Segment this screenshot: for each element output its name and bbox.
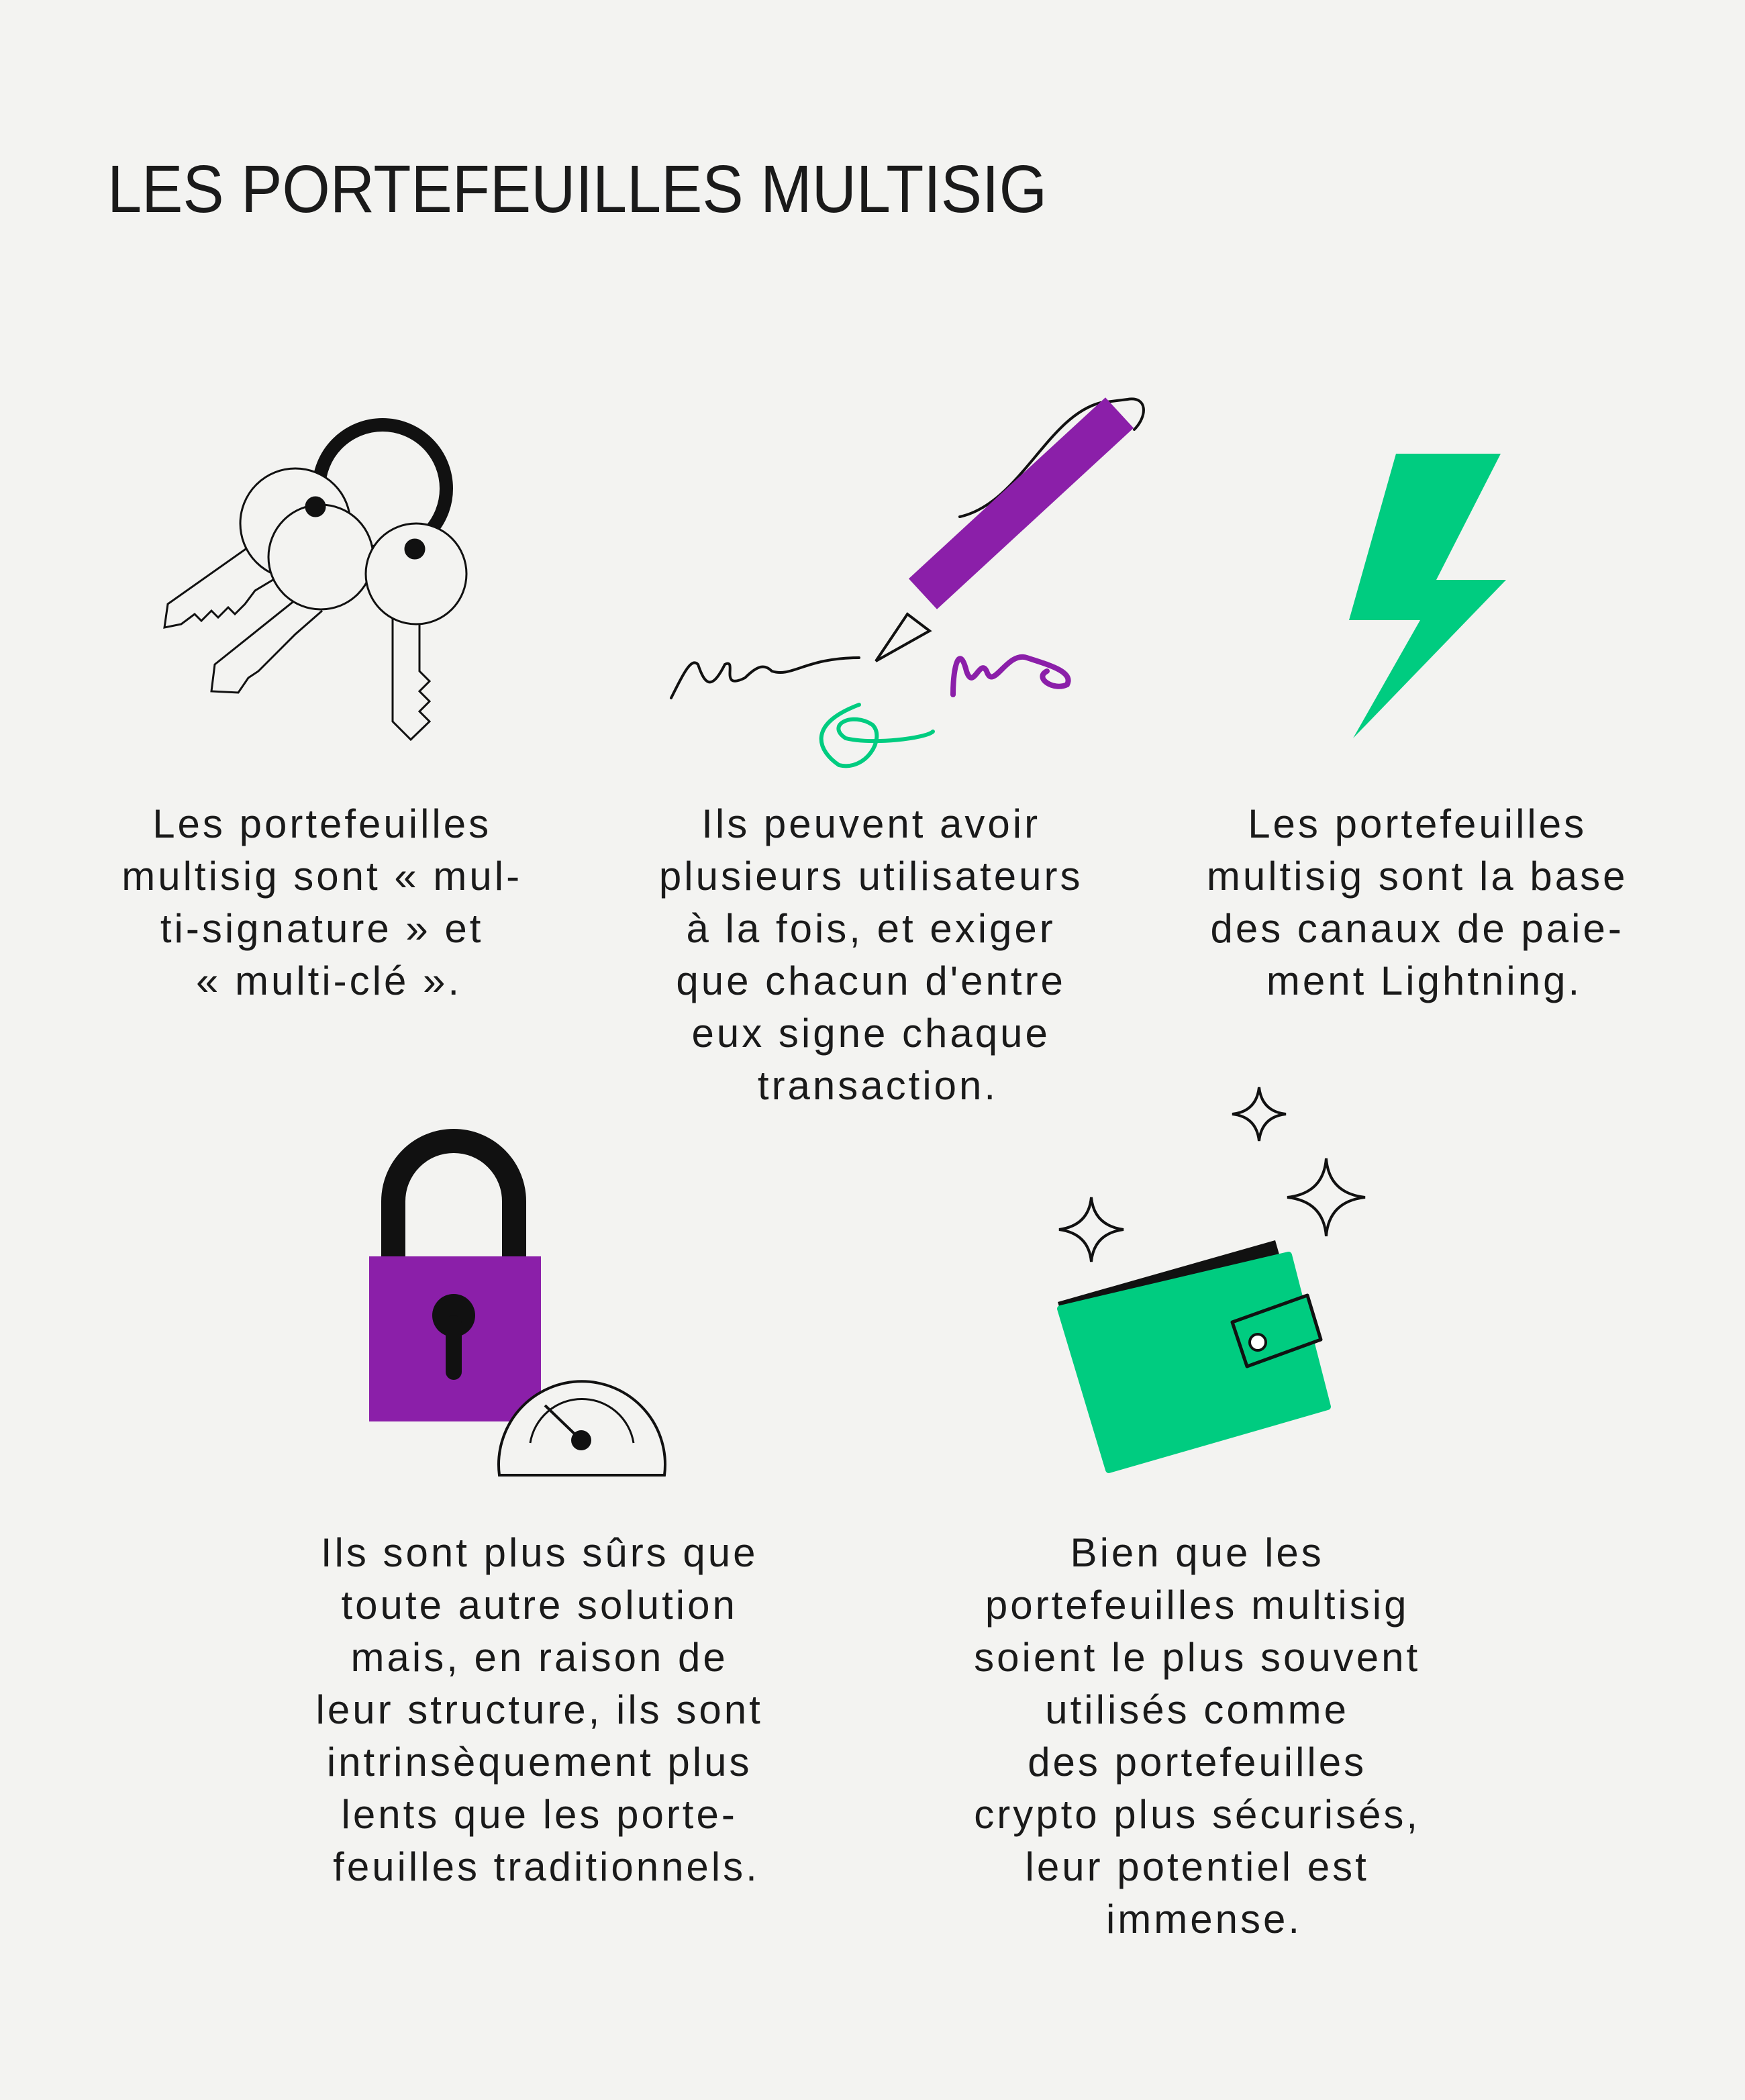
text: col3: Les portefeuilles <box>1248 801 1587 846</box>
text: lock: lents que les porte- <box>342 1792 738 1837</box>
text: wallet: utilisés comme <box>1045 1687 1349 1732</box>
text: wallet: crypto plus sécurisés, <box>974 1792 1420 1837</box>
text: col1: Les portefeuilles <box>152 801 491 846</box>
text: wallet: soient le plus souvent <box>974 1635 1420 1680</box>
text: col2: que chacun d'entre <box>676 958 1066 1003</box>
text: col2: eux signe chaque <box>691 1011 1050 1056</box>
text: wallet: des portefeuilles <box>1028 1740 1366 1785</box>
icon: wallet with sparkles <box>1058 1087 1365 1470</box>
text: col1: ti-signature » et <box>160 906 483 951</box>
text: lock: mais, en raison de <box>351 1635 728 1680</box>
text: lock: Ils sont plus sûrs que <box>321 1530 758 1575</box>
text: col2: plusieurs utilisateurs <box>659 854 1083 899</box>
text: col1: « multi-clé ». <box>196 958 462 1003</box>
text: col3: des canaux de paie- <box>1210 906 1624 951</box>
text: col2: transaction. <box>758 1063 998 1108</box>
icon: padlock with gauge <box>369 1141 665 1475</box>
text: lock: toute autre solution <box>341 1583 738 1628</box>
text: wallet: immense. <box>1106 1897 1302 1942</box>
icon: lightning <box>1349 454 1506 738</box>
text: lock: feuilles traditionnels. <box>333 1844 760 1889</box>
icon: keys <box>164 425 466 740</box>
text: col3: multisig sont la base <box>1207 854 1628 899</box>
text: col3: ment Lightning. <box>1266 958 1582 1003</box>
text: wallet: leur potentiel est <box>1026 1844 1369 1889</box>
text: col1: multisig sont « mul- <box>121 854 522 899</box>
text: col2: Ils peuvent avoir <box>701 801 1040 846</box>
text: wallet: portefeuilles multisig <box>985 1583 1409 1628</box>
text: lock: leur structure, ils sont <box>316 1687 763 1732</box>
text: col2: à la fois, et exiger <box>687 906 1056 951</box>
text: lock: intrinsèquement plus <box>327 1740 752 1785</box>
title: LES PORTEFEUILLES MULTISIG <box>107 152 1047 227</box>
text: wallet: Bien que les <box>1070 1530 1324 1575</box>
icon: pen signature <box>671 399 1144 766</box>
